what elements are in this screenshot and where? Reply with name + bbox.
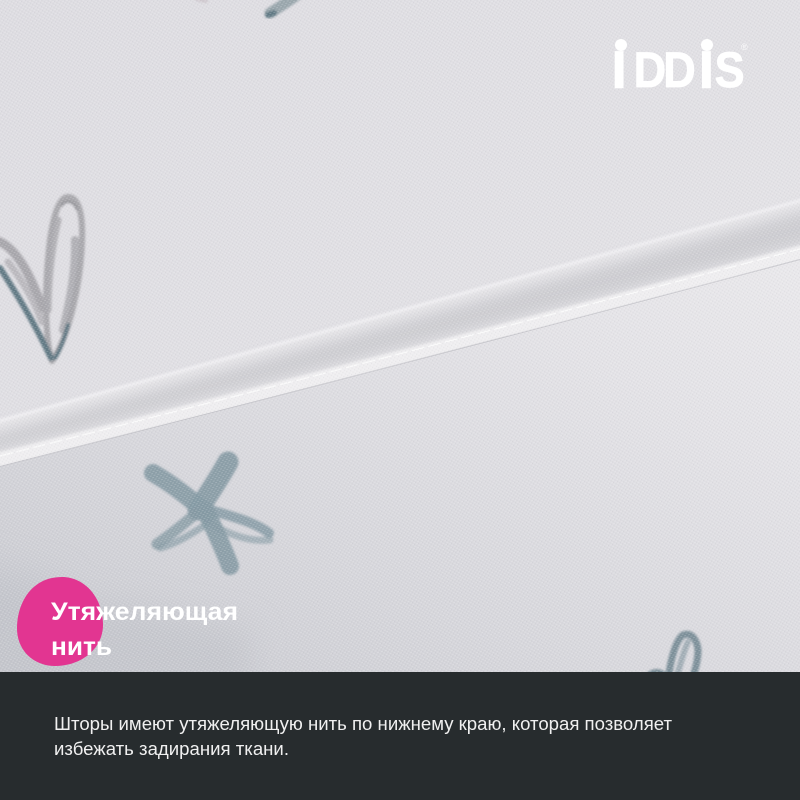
heading: нить	[51, 633, 112, 661]
IDDIS logo: ®	[741, 42, 748, 52]
heart illustration left	[0, 197, 82, 361]
caption text: избежать задирания ткани.	[54, 739, 289, 759]
starfish illustration	[153, 462, 270, 566]
soft shadow smudge lower left	[0, 560, 250, 690]
seam fold band	[0, 195, 800, 471]
IDDIS logo: IDDIS	[613, 43, 745, 99]
heading	[51, 598, 238, 661]
pink blob accent	[17, 577, 103, 666]
heart illustration bottom right	[648, 634, 698, 684]
heading: Утяжеляющая	[51, 598, 238, 626]
caption text	[54, 714, 672, 759]
fabric drawing fragments top edge	[197, 0, 297, 15]
caption text: Шторы имеют утяжеляющую нить по нижнему краю, которая позволяет	[54, 714, 672, 734]
dark caption bar	[0, 672, 800, 800]
